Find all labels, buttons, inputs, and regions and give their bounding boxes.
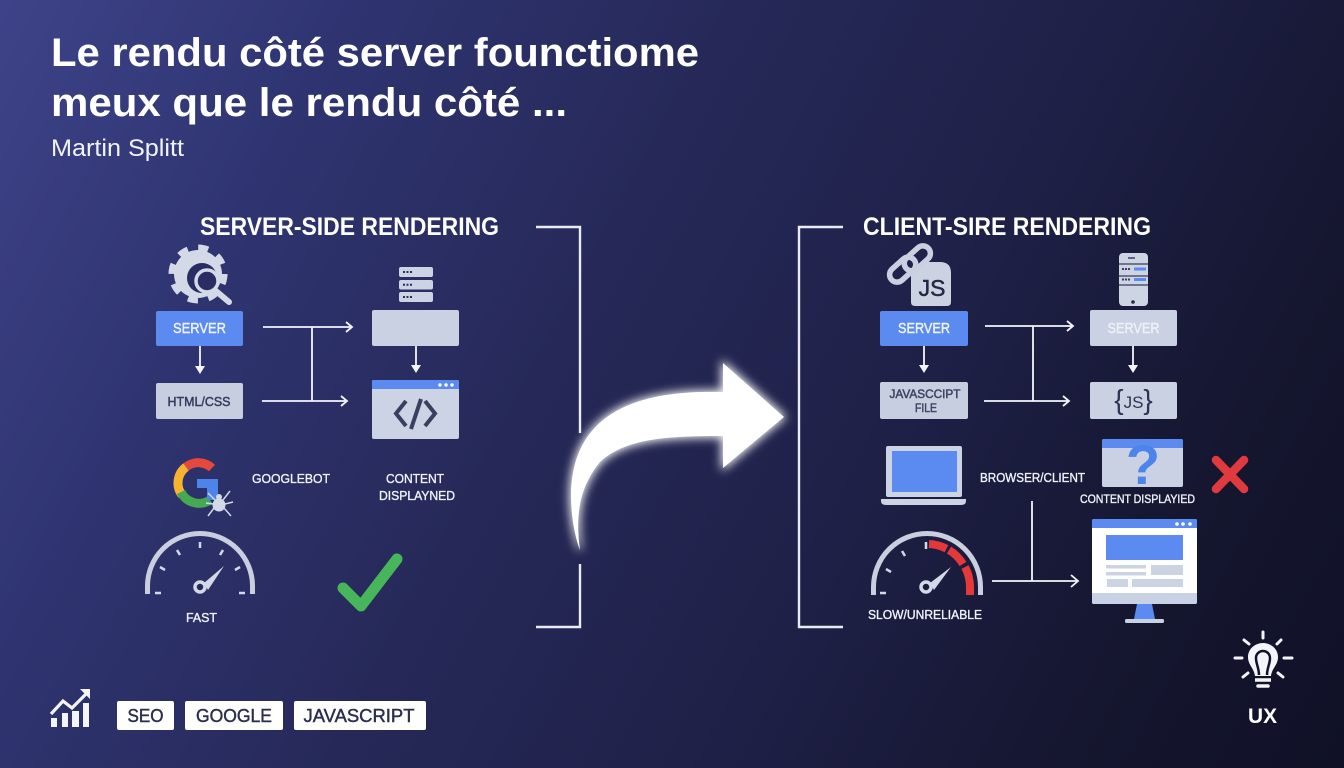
icon: growth chart xyxy=(51,689,90,727)
box: html/css: HTML/CSS xyxy=(168,394,231,409)
icon: red cross xyxy=(1216,460,1244,489)
icon: google g with spider xyxy=(178,463,233,516)
box: javascript file: FILE xyxy=(915,401,937,415)
panel: server-side rendering xyxy=(148,213,580,627)
tag: seo: SEO xyxy=(128,705,164,726)
arrow: browser to page xyxy=(992,501,1078,587)
icon: code window xyxy=(372,380,459,439)
box: client server xyxy=(880,311,968,346)
box: html/css xyxy=(156,383,243,419)
label: googlebot: GOOGLEBOT xyxy=(252,472,330,486)
tag: seo xyxy=(117,701,174,730)
arrows: server and html to right column xyxy=(262,322,352,406)
box: light server xyxy=(1090,310,1177,346)
box: light server: SERVER xyxy=(1108,320,1160,337)
arrow: big glowing curved xyxy=(571,363,784,550)
label: ux: UX xyxy=(1248,705,1277,728)
icon: chain and js file: JS xyxy=(919,275,945,301)
icon: server stack xyxy=(399,267,433,302)
bracket: server-side xyxy=(536,227,580,627)
tag: javascript: JAVASCRIPT xyxy=(304,705,414,726)
label: content displayed: DISPLAYNED xyxy=(379,489,455,503)
icon: fast gauge xyxy=(148,534,252,594)
label: content displayied: CONTENT DISPLAYIED xyxy=(1080,492,1195,506)
icon: monitor page xyxy=(1092,519,1197,623)
label: browser/client: BROWSER/CLIENT xyxy=(980,471,1085,485)
box: server: SERVER xyxy=(173,320,226,337)
box: empty server xyxy=(372,310,459,346)
box: js braces: { xyxy=(1114,384,1124,415)
bracket: client-side xyxy=(799,227,843,627)
box: javascript file xyxy=(880,382,968,419)
icon: question window xyxy=(1102,433,1183,496)
icon: chain and js file xyxy=(886,243,951,306)
icon: slow gauge xyxy=(874,533,980,595)
label: content displayed xyxy=(379,472,455,503)
label: fast: FAST xyxy=(186,610,217,625)
box: server xyxy=(156,311,243,346)
title xyxy=(51,31,699,125)
label: content displayed: CONTENT xyxy=(386,472,444,486)
title: Le rendu côté server founctiome xyxy=(51,31,699,75)
tag: javascript xyxy=(294,701,426,730)
arrow: server to js xyxy=(1128,346,1138,373)
icon: question window: ? xyxy=(1126,433,1160,496)
icon: green check xyxy=(343,559,397,606)
heading: client-side: CLIENT-SIRE RENDERING xyxy=(863,213,1151,241)
arrow: box to window xyxy=(411,346,421,373)
heading: server-side: SERVER-SIDE RENDERING xyxy=(200,213,499,241)
arrow: server to html xyxy=(195,346,205,374)
panel: client-side rendering xyxy=(799,213,1244,627)
icon: light bulb xyxy=(1235,632,1292,686)
tag: google: GOOGLE xyxy=(196,705,272,726)
arrows: client to right column xyxy=(984,321,1073,406)
icon: laptop xyxy=(881,446,966,505)
tag: google xyxy=(185,701,283,730)
icon: gear with magnifier xyxy=(172,248,229,302)
box: js braces: } xyxy=(1143,384,1153,415)
icon: phone server xyxy=(1119,253,1148,306)
author: Martin Splitt xyxy=(51,135,184,162)
box: client server: SERVER xyxy=(898,320,950,337)
arrow: server to js file xyxy=(919,346,929,373)
box: javascript file: JAVASCCIPT xyxy=(890,387,961,401)
title: meux que le rendu côté ... xyxy=(51,81,567,125)
label: slow/unreliable: SLOW/UNRELIABLE xyxy=(868,608,982,622)
box: js braces: JS xyxy=(1124,393,1143,412)
box: js braces xyxy=(1090,382,1177,419)
